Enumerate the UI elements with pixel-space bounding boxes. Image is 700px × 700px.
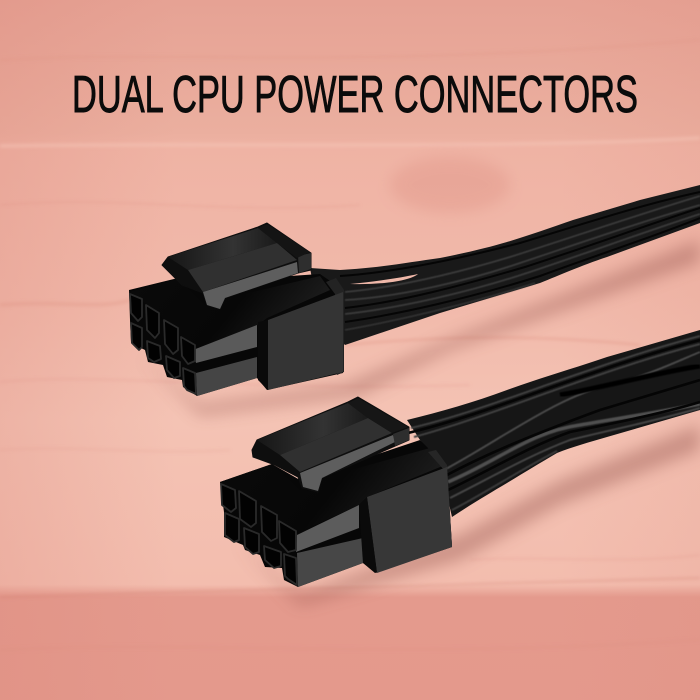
socket holes <box>221 484 297 585</box>
latch <box>252 397 409 492</box>
top connector <box>129 223 344 396</box>
connector body <box>220 440 452 587</box>
soft shadows <box>140 240 700 605</box>
bottom cable bundle <box>407 330 700 517</box>
upper front face <box>193 325 257 363</box>
connector body <box>129 274 343 396</box>
body top face <box>220 448 445 533</box>
side tab <box>428 450 452 548</box>
wood knot tint <box>390 157 510 213</box>
latch <box>162 223 311 309</box>
lower front face <box>297 538 363 587</box>
sleeve <box>367 467 452 573</box>
top cable bundle <box>310 185 700 345</box>
cable gap <box>350 274 418 284</box>
body top face <box>129 276 330 350</box>
side tab <box>326 278 344 375</box>
upper front face <box>296 505 359 552</box>
lower front face <box>196 357 257 396</box>
bottom connector <box>220 397 452 587</box>
sleeve <box>268 292 343 390</box>
socket holes <box>130 294 196 394</box>
